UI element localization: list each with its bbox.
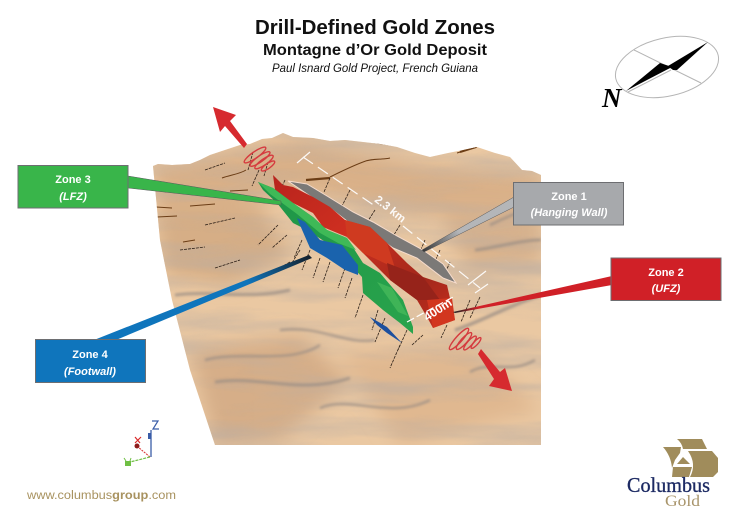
arrow: upper strike direction	[213, 107, 276, 173]
brown ridge traces	[156, 142, 477, 242]
icon: ship sails	[663, 439, 718, 477]
dimension: width	[407, 295, 455, 324]
website url: www.columbus group .com	[26, 490, 176, 502]
callout: zone 2: (UFZ)	[652, 283, 681, 295]
dimension: width: 400m	[421, 295, 455, 324]
callout: zone 3	[18, 166, 281, 208]
title block	[255, 17, 495, 75]
zone 4 footwall solid	[297, 218, 358, 275]
drill holes	[165, 152, 480, 368]
callout: zone 4: Zone 4	[72, 349, 109, 361]
dimension: strike length	[297, 152, 488, 293]
logo: Columbus Gold: Gold	[665, 493, 700, 510]
callout: zone 1: Zone 1	[551, 191, 587, 203]
zone 2 UFZ solid	[273, 175, 455, 328]
dimension: strike length: 2.3 km	[372, 194, 408, 225]
callout: zone 3: Zone 3	[55, 174, 91, 186]
icon: XYZ axes	[124, 421, 159, 466]
zone 1 hanging wall solid	[288, 181, 456, 283]
icon: north compass: N	[601, 83, 623, 113]
subtitle: Montagne d’Or Gold Deposit	[263, 42, 488, 59]
callout: zone 4	[36, 255, 312, 382]
main title: Drill-Defined Gold Zones	[255, 17, 495, 39]
callout: zone 3: (LFZ)	[59, 191, 87, 203]
logo: Columbus Gold: Columbus	[627, 473, 710, 497]
callout: zone 1	[422, 182, 624, 252]
callout: zone 2: Zone 2	[648, 267, 684, 279]
mineralized zones	[258, 175, 456, 343]
callout: zone 2	[453, 258, 721, 313]
icon: north compass	[601, 27, 725, 113]
callout: zone 1: (Hanging Wall)	[531, 207, 608, 219]
zone 3 LFZ solid	[258, 182, 413, 334]
callout: zone 4: (Footwall)	[64, 366, 116, 378]
zone 4 outlying lens	[370, 317, 402, 343]
arrow: lower strike direction	[447, 326, 512, 391]
terrain map	[150, 130, 545, 450]
project location: Paul Isnard Gold Project, French Guiana	[272, 61, 478, 75]
logo: Columbus Gold	[627, 439, 718, 510]
